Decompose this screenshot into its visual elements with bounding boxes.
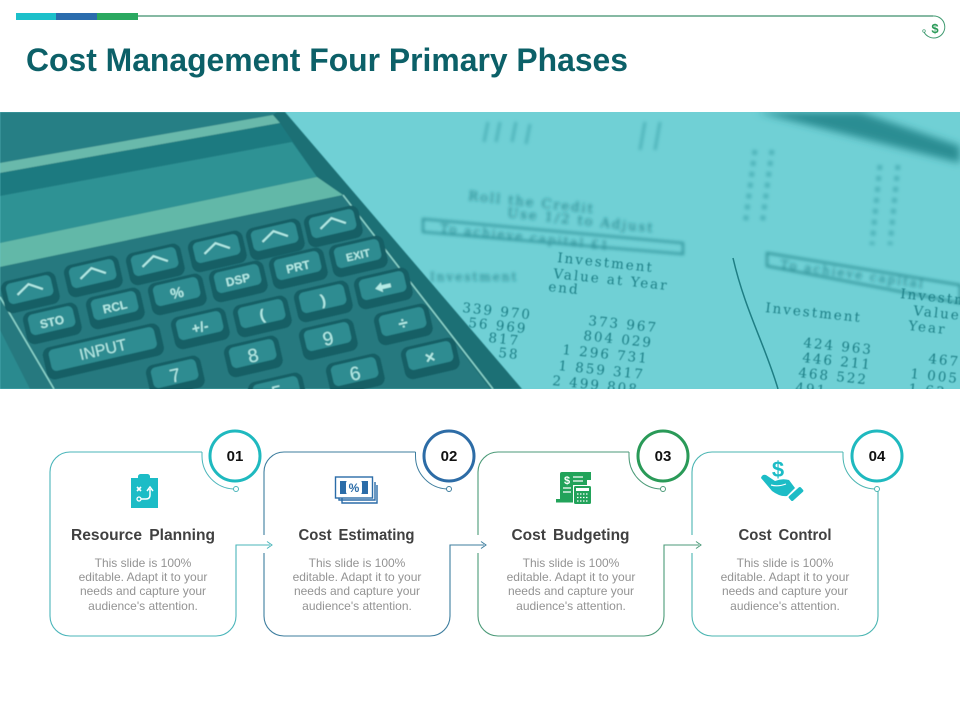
photo: calculator on financial report: Year	[907, 318, 947, 338]
photo: calculator on financial report: Use 1/2 to Adjust	[507, 206, 655, 236]
panel: Cost Control	[692, 431, 902, 636]
calculator keys: 5	[270, 382, 285, 405]
photo: calculator on financial report: Investment	[430, 270, 518, 284]
heading: Cost Control	[738, 527, 832, 544]
photo: calculator on financial report: 1 005	[910, 366, 960, 387]
heading: Cost Estimating	[298, 527, 414, 544]
calculator keys: )	[319, 292, 327, 309]
photo: calculator on financial report: 2 499 808	[552, 373, 639, 398]
number badge 02	[424, 431, 474, 481]
photo: calculator on financial report: 1 296 731	[562, 342, 649, 367]
calculator keys: STO	[39, 312, 65, 332]
calculator keys: 8	[246, 345, 261, 368]
body text: needs and capture your	[80, 584, 206, 598]
calculator keys: 9	[321, 328, 336, 351]
icon: clipboard plan	[131, 474, 158, 508]
body text	[293, 556, 421, 613]
photo: calculator on financial report: 804 029	[583, 328, 654, 351]
icon: receipt and calculator	[556, 472, 591, 504]
body text	[79, 556, 207, 613]
number badge 04	[852, 431, 902, 481]
photo: calculator on financial report: 468 522	[798, 365, 869, 388]
number badge 03	[638, 431, 688, 481]
photo: calculator on financial report: Investment	[557, 250, 655, 276]
calculator keys: 6	[348, 363, 363, 386]
calculator keys: DSP	[224, 270, 252, 290]
photo: calculator on financial report: 491	[795, 380, 828, 399]
body text: audience's attention.	[516, 599, 626, 613]
panel: Cost Budgeting	[478, 431, 701, 636]
header accent bar	[16, 13, 933, 20]
icon: dollar logo	[923, 16, 945, 38]
calculator keys: ×	[423, 347, 437, 368]
number badge 01	[210, 431, 260, 481]
photo: calculator on financial report: 58	[498, 345, 520, 363]
photo: calculator on financial report: 446 211	[802, 350, 873, 373]
calculator keys	[0, 205, 460, 389]
body text: needs and capture your	[294, 584, 420, 598]
icon: percent banknotes	[336, 477, 377, 503]
icon: dollar logo: $	[931, 21, 939, 36]
photo: calculator on financial report: end	[548, 279, 580, 298]
icon: hand holding dollar: $	[772, 457, 784, 482]
number badge 04: 04	[869, 448, 886, 465]
photo: calculator on financial report: 1 859 317	[558, 358, 645, 383]
calculator keys: 7	[168, 365, 183, 388]
body text: This slide is 100%	[737, 556, 834, 570]
body text: audience's attention.	[302, 599, 412, 613]
photo: calculator on financial report: Roll the Credit	[468, 189, 596, 217]
body text: This slide is 100%	[95, 556, 192, 570]
body text: This slide is 100%	[309, 556, 406, 570]
calculator keys: RCL	[101, 297, 129, 317]
photo: calculator on financial report: 424 963	[803, 335, 874, 358]
number badge 03: 03	[655, 448, 671, 465]
calculator keys: EXIT	[345, 247, 372, 265]
body text: needs and capture your	[722, 584, 848, 598]
photo: calculator on financial report: 373 967	[588, 313, 659, 336]
body text: editable. Adapt it to your	[721, 570, 849, 584]
body text	[507, 556, 635, 613]
title: Cost Management Four Primary Phases	[26, 42, 628, 78]
body text: audience's attention.	[730, 599, 840, 613]
photo: calculator on financial report: To achieve capital	[780, 257, 926, 291]
icon: receipt and calculator: $	[564, 475, 570, 487]
photo: calculator on financial report: Value at Year	[552, 266, 669, 294]
photo: calculator on financial report: 56 969	[468, 315, 528, 337]
number badge 02: 02	[441, 448, 457, 465]
photo: calculator on financial report: 339 970	[462, 300, 533, 323]
photo: calculator on financial report: 1 63	[908, 381, 947, 401]
photo: calculator on financial report: 467	[928, 351, 960, 370]
photo: calculator on financial report	[0, 112, 960, 416]
calculator keys: +/-	[190, 317, 210, 337]
body text: audience's attention.	[88, 599, 198, 613]
panel: Resource Planning	[50, 431, 272, 636]
calculator keys: %	[169, 284, 186, 303]
icon: hand holding dollar	[761, 457, 804, 502]
calculator keys: INPUT	[78, 337, 129, 364]
photo: calculator on financial report: 817	[488, 330, 521, 349]
body text: editable. Adapt it to your	[507, 570, 635, 584]
heading: Resource Planning	[71, 527, 215, 544]
heading: Cost Budgeting	[512, 527, 630, 544]
icon: percent banknotes: %	[349, 481, 360, 495]
calculator keys: (	[258, 307, 266, 324]
body text: editable. Adapt it to your	[79, 570, 207, 584]
photo: calculator on financial report: Investment	[765, 300, 863, 326]
number badge 01: 01	[227, 448, 243, 465]
body text: needs and capture your	[508, 584, 634, 598]
calculator keys: PRT	[285, 257, 312, 277]
panel: Cost Estimating	[264, 431, 486, 636]
body text: editable. Adapt it to your	[293, 570, 421, 584]
body text: This slide is 100%	[523, 556, 620, 570]
calculator keys: ÷	[396, 313, 410, 334]
photo: calculator on financial report: To achieve capital £1	[440, 221, 611, 253]
body text	[721, 556, 849, 613]
